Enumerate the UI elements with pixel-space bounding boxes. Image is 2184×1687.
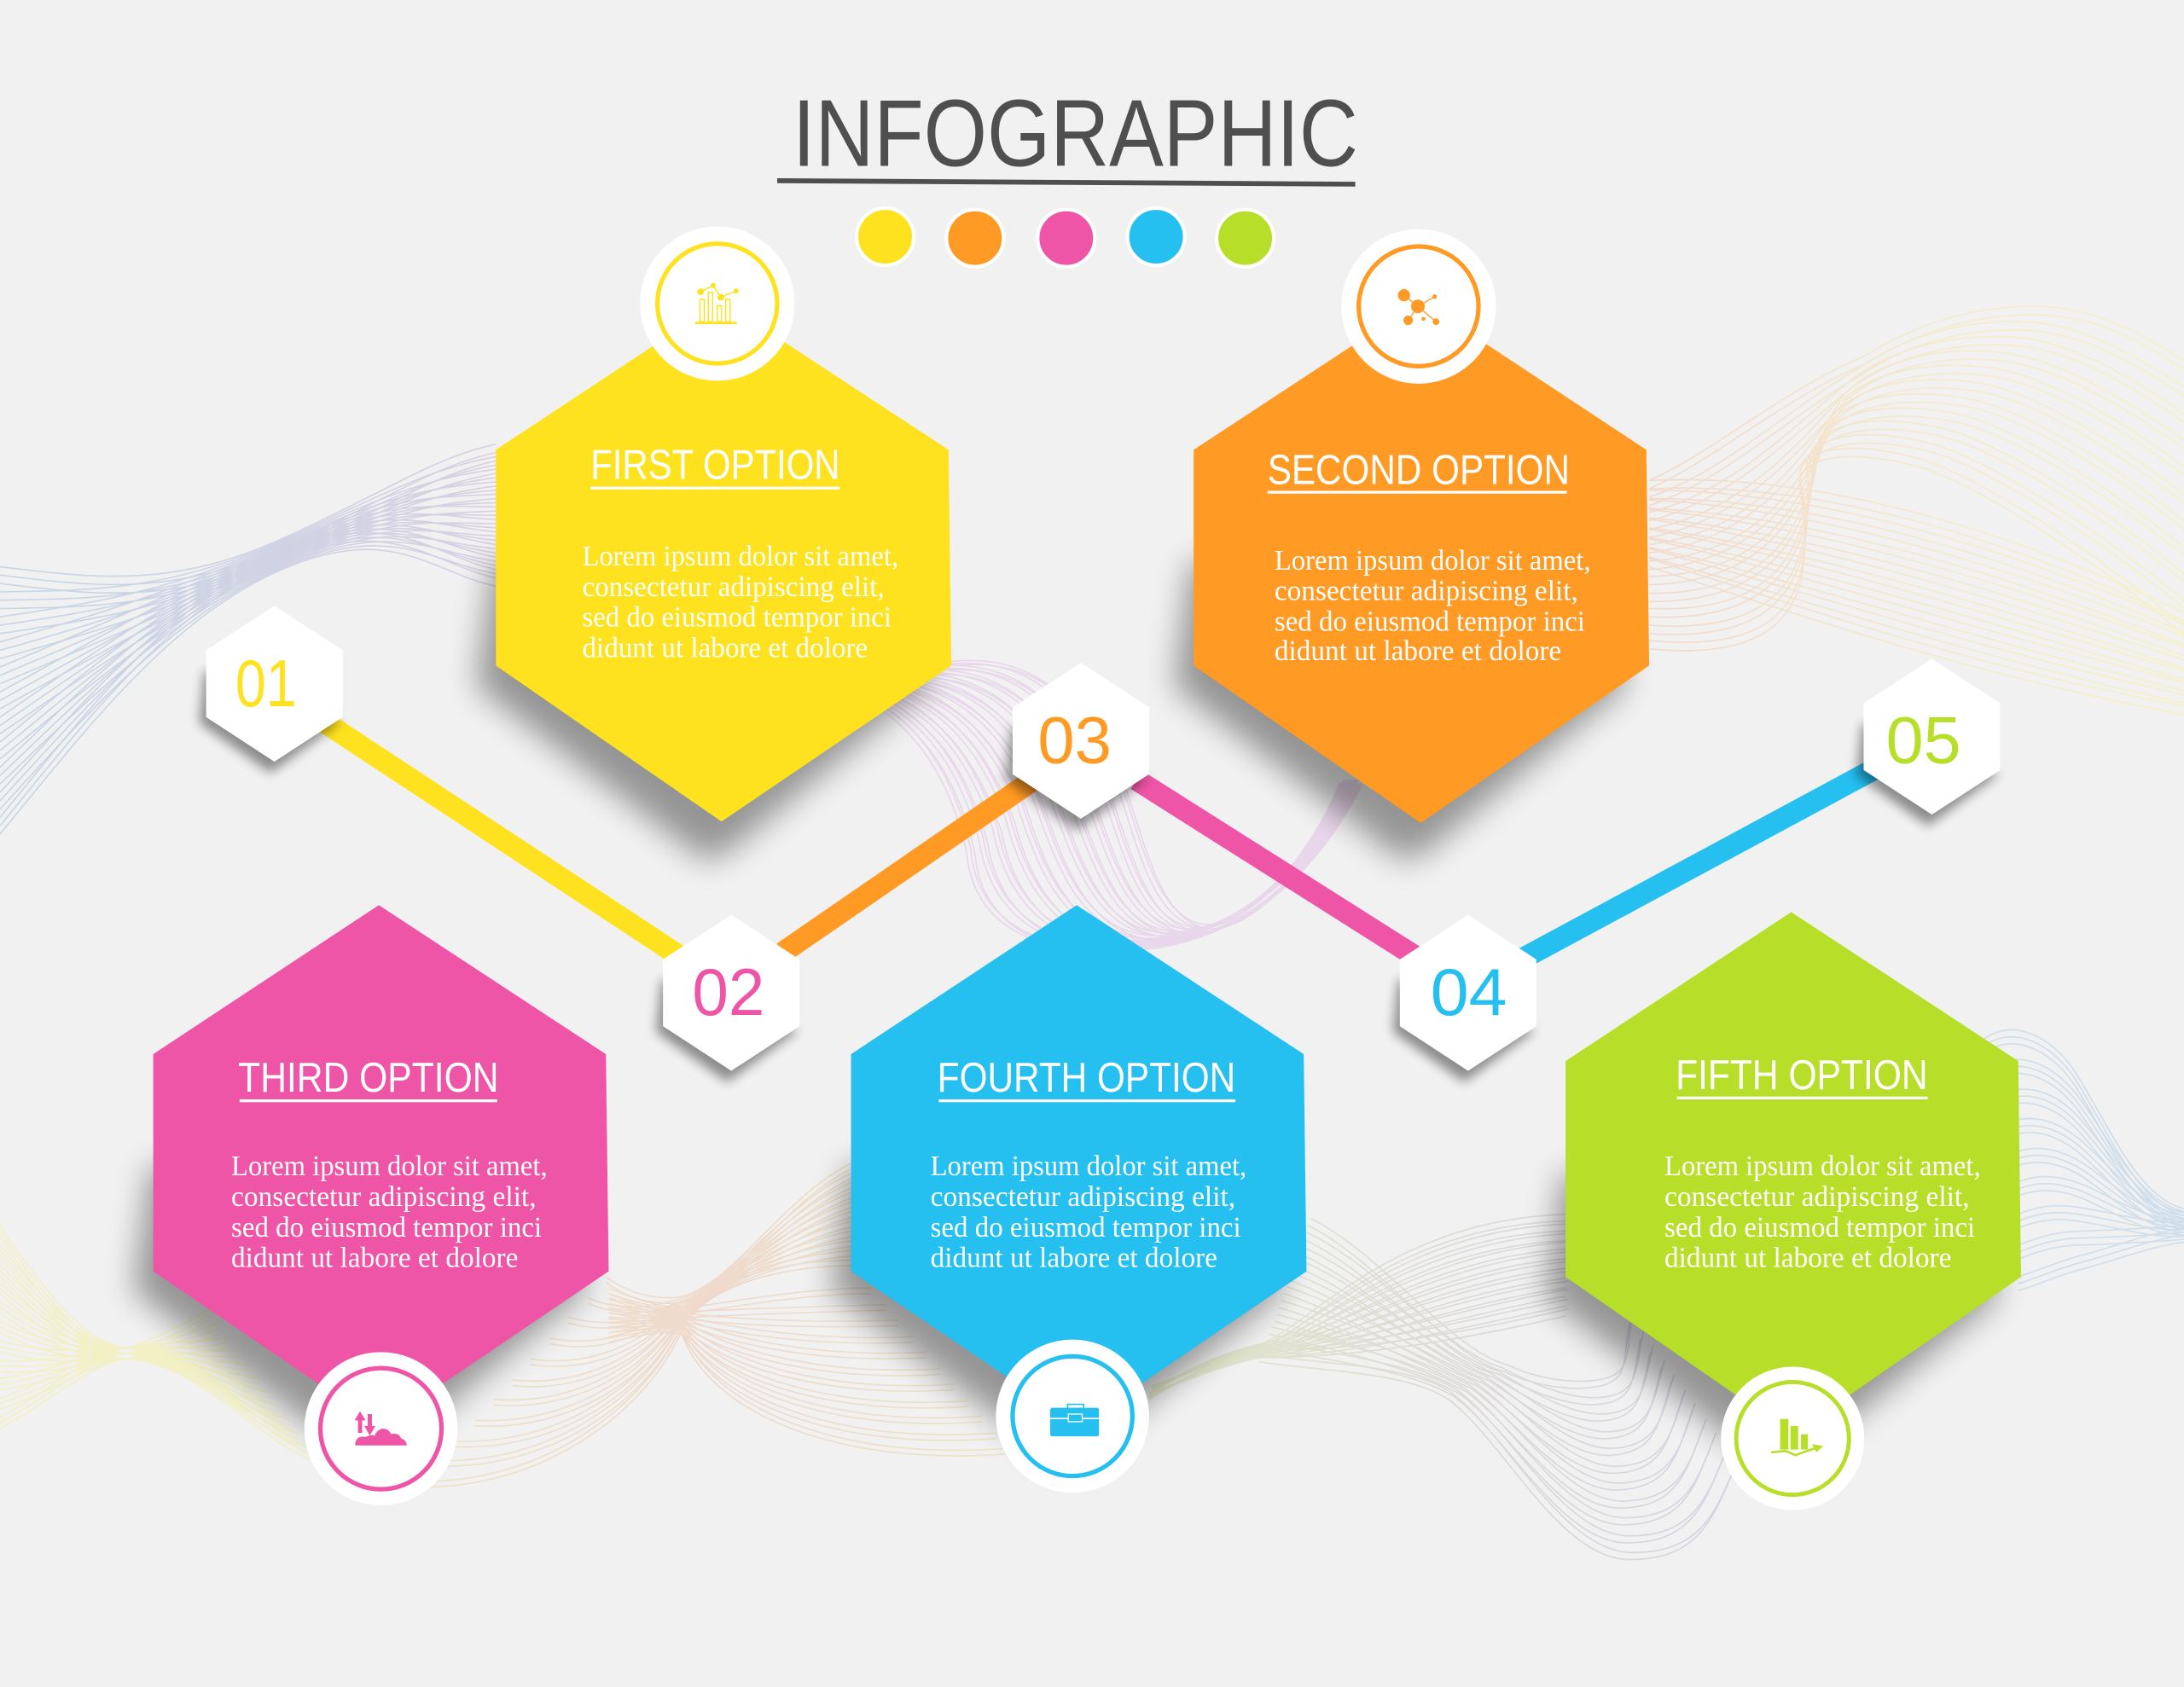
- heading: third option: THIRD OPTION: [238, 1055, 498, 1101]
- icon: cloud with arrows: [355, 1412, 407, 1446]
- body text: fifth option: [1664, 1150, 1981, 1274]
- body text: second option: didunt ut labore et dolore: [1275, 635, 1561, 667]
- body text: third option: sed do eiusmod tempor inci: [231, 1211, 542, 1244]
- panel: third option: [134, 905, 608, 1465]
- body text: fourth option: Lorem ipsum dolor sit amet,: [931, 1150, 1246, 1182]
- number hexagon 03: 03: [1037, 703, 1112, 778]
- body text: fifth option: Lorem ipsum dolor sit amet,: [1664, 1150, 1981, 1182]
- body text: fifth option: didunt ut labore et dolore: [1664, 1242, 1951, 1274]
- body text: third option: Lorem ipsum dolor sit amet,: [231, 1150, 548, 1182]
- wave: bottom left yellow cross: [0, 1226, 309, 1459]
- icon: network nodes: [1398, 290, 1439, 324]
- connector: 01 to 02: [323, 722, 682, 958]
- heading: second option: SECOND OPTION: [1268, 447, 1570, 493]
- heading: first option: FIRST OPTION: [590, 443, 839, 489]
- heading: fourth option: FOURTH OPTION: [938, 1055, 1235, 1101]
- body text: fifth option: sed do eiusmod tempor inci: [1664, 1211, 1975, 1244]
- body text: fourth option: [931, 1150, 1246, 1274]
- body text: fifth option: consectetur adipiscing elit,: [1664, 1180, 1970, 1213]
- icon badge: growth chart: [1721, 1366, 1864, 1510]
- body text: fourth option: sed do eiusmod tempor inci: [931, 1211, 1241, 1244]
- icon: briefcase: [1050, 1405, 1099, 1436]
- panel: first option: [476, 301, 951, 861]
- body text: third option: didunt ut labore et dolore: [231, 1242, 518, 1274]
- number hexagon 04: 04: [1431, 954, 1507, 1029]
- title underline: [777, 178, 1356, 187]
- connector: 02 to 03: [783, 780, 1033, 953]
- icon badge: cloud transfer: [305, 1352, 457, 1505]
- wave: bottom middle peach: [418, 1162, 1010, 1487]
- colour legend dots: [857, 208, 1274, 267]
- number hexagon 03: [1006, 663, 1149, 830]
- body text: third option: consectetur adipiscing elit,: [231, 1180, 537, 1213]
- body text: second option: Lorem ipsum dolor sit amet,: [1275, 544, 1590, 577]
- body text: second option: sed do eiusmod tempor inci: [1275, 606, 1585, 638]
- body text: fourth option: didunt ut labore et dolore: [931, 1242, 1217, 1274]
- icon badge: network: [1341, 229, 1496, 384]
- number hexagon 04: [1393, 915, 1536, 1082]
- wave: centre lavender ribbon: [876, 660, 1362, 951]
- number hexagon 02: 02: [692, 954, 764, 1029]
- panel: fourth option: [832, 905, 1306, 1465]
- body text: second option: [1275, 544, 1590, 667]
- number hexagon 05: [1856, 658, 2000, 826]
- body text: fourth option: consectetur adipiscing elit,: [931, 1180, 1235, 1213]
- wave: upper right peach-yellow arcs: [1649, 306, 2184, 715]
- wave: far right blue: [1978, 1030, 2184, 1290]
- icon badge: briefcase: [996, 1340, 1149, 1493]
- connector: 04 to 05: [1524, 766, 1880, 958]
- title: INFOGRAPHIC: [793, 79, 1358, 186]
- body text: first option: consectetur adipiscing elit,: [582, 571, 885, 603]
- number hexagon 01: [199, 606, 343, 773]
- number hexagon 01: 01: [235, 646, 297, 721]
- body text: second option: consectetur adipiscing elit,: [1275, 575, 1578, 607]
- number hexagon 02: [656, 915, 799, 1082]
- body text: third option: [231, 1150, 548, 1274]
- wave: bottom right grey-purple: [1149, 1215, 1737, 1560]
- icon badge: analytics chart: [640, 226, 794, 381]
- panel: second option: [1174, 301, 1649, 861]
- body text: first option: [582, 540, 898, 664]
- body text: first option: sed do eiusmod tempor inci: [582, 601, 892, 634]
- body text: first option: didunt ut labore et dolore: [582, 632, 868, 664]
- panel: fifth option: [1546, 912, 2021, 1472]
- body text: first option: Lorem ipsum dolor sit amet,: [582, 540, 898, 572]
- wave: left blue-lavender: [0, 444, 496, 834]
- connector: 03 to 04: [1136, 780, 1418, 958]
- heading: fifth option: FIFTH OPTION: [1676, 1052, 1928, 1099]
- number hexagon 05: 05: [1886, 703, 1961, 778]
- icon: bars with arrow: [1771, 1419, 1823, 1455]
- icon: bar and line chart: [695, 283, 739, 324]
